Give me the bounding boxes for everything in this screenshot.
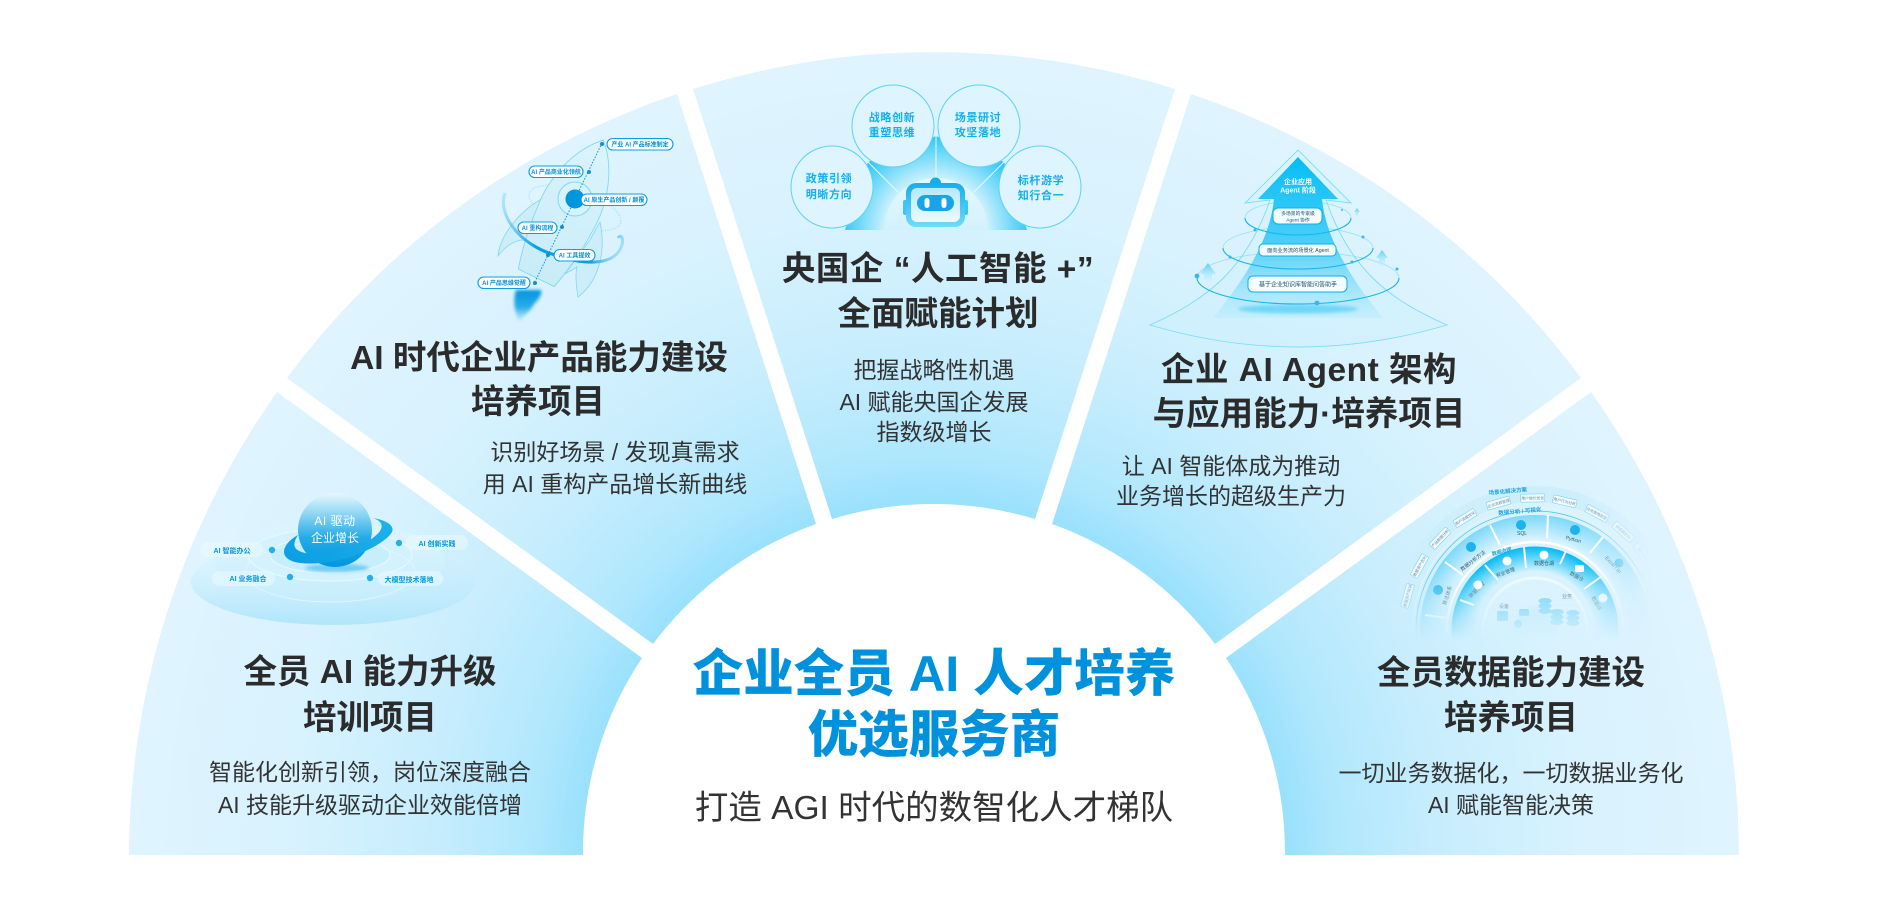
illustration: agent arrow pyramid: 企业应用: [1284, 177, 1312, 186]
illustration: AI planet: 企业增长: [311, 530, 359, 545]
center subtitle: 打造 AGI 时代的数智化人才梯队: [695, 790, 1173, 827]
heading 5: [1377, 655, 1645, 737]
illustration: data rings: 用户行为分析: [1553, 496, 1577, 506]
center title: 企业全员 AI 人才培养: [693, 645, 1175, 702]
sector background 4: [1052, 94, 1581, 644]
illustration: data rings: 产品数据分析: [1430, 528, 1450, 548]
illustration: AI planet: AI 业务融合: [230, 574, 266, 583]
illustration: rocket: AI 产品思维觉醒: [482, 279, 526, 287]
illustration: rocket: AI 工具提效: [559, 252, 590, 260]
heading 4: [1153, 352, 1465, 433]
illustration: data rings: 用户增长优化: [1521, 495, 1544, 501]
illustration: robot with four circles: 重塑思维: [869, 125, 915, 139]
sector background 2: [287, 94, 816, 644]
description 3: [839, 357, 1029, 445]
illustration: robot with four circles: 攻坚落地: [955, 125, 1001, 139]
description 5: [1338, 760, 1684, 818]
heading 2: AI 时代企业产品能力建设: [350, 340, 728, 377]
illustration: data rings: 数据资产培训: [1402, 584, 1413, 607]
illustration: AI planet: 大模型技术落地: [384, 575, 434, 584]
illustration: AI planet: AI 智能办公: [214, 546, 250, 555]
illustration: rocket: AI 重构流程: [522, 224, 553, 232]
illustration: data rings: 安全管理: [1495, 566, 1516, 579]
illustration: AI planet: AI 创新实践: [419, 539, 455, 548]
heading 3: [782, 251, 1094, 333]
heading 1: 全员 AI 能力升级: [243, 654, 497, 691]
heading 2: 培养项目: [471, 384, 605, 421]
heading 5: 培养项目: [1444, 700, 1578, 737]
illustration: agent arrow pyramid: 面向业务流的场景化 Agent: [1267, 246, 1329, 254]
illustration: data rings: 业务: [1562, 593, 1572, 600]
illustration: data rings: 客户分析: [1637, 547, 1650, 562]
illustration: robot with four circles: 场景研讨: [955, 111, 1001, 124]
description 2: [483, 439, 747, 497]
illustration: robot with four circles: 战略创新: [869, 110, 915, 124]
illustration: robot with four circles: 标杆游学: [1018, 173, 1064, 187]
illustration: AI planet: [191, 493, 475, 625]
description 3: AI 赋能央国企发展: [839, 389, 1029, 415]
illustration: AI planet: AI 驱动: [314, 514, 356, 528]
description 3: 把握战略性机遇: [854, 357, 1014, 383]
panel: AI product capability: [287, 94, 816, 644]
illustration: rocket: AI 原生产品创新 / 颠覆: [584, 196, 644, 204]
description 4: [1116, 453, 1346, 509]
description 1: [209, 759, 531, 818]
description 3: 指数级增长: [876, 419, 992, 445]
description 1: 智能化创新引领，岗位深度融合: [209, 759, 531, 785]
panel: full staff AI upgrade: [129, 392, 642, 855]
description 4: 业务增长的超级生产力: [1116, 483, 1346, 509]
description 4: 让 AI 智能体成为推动: [1122, 453, 1340, 479]
illustration: agent arrow pyramid: [1150, 150, 1447, 347]
illustration: data rings: 业务策略制定: [1586, 506, 1608, 521]
illustration: data rings: SQL: [1517, 531, 1527, 537]
illustration: agent arrow pyramid: 基于企业知识库智能问答助手: [1259, 280, 1337, 288]
illustration: rocket: [478, 127, 673, 322]
illustration: robot with four circles: 明晰方向: [806, 187, 852, 201]
description 5: AI 赋能智能决策: [1428, 792, 1594, 818]
illustration: data rings: 供应商优化: [1615, 524, 1632, 540]
illustration: data rings: 数据分析 / 可视化: [1498, 505, 1542, 517]
sector background 3: [693, 52, 1175, 519]
panel: SOE AI plus: [693, 52, 1175, 519]
illustration: data rings: 场景化解决方案: [1488, 485, 1528, 497]
heading 2: [350, 340, 728, 421]
illustration: robot with four circles: 知行合一: [1018, 188, 1064, 202]
heading 3: 全面赋能计划: [838, 296, 1038, 333]
sector background 1: [129, 392, 642, 855]
illustration: data rings: Python: [1565, 535, 1582, 545]
center title: 优选服务商: [808, 706, 1060, 763]
illustration: data rings: 用户流程优化: [1454, 510, 1476, 526]
illustration: data rings: 企业流程管理: [1487, 498, 1510, 509]
illustration: data rings: 数据资产优化: [1412, 555, 1427, 577]
panel: enterprise AI agent: [1052, 94, 1581, 644]
illustration: data rings: 数据湖: [1590, 595, 1603, 612]
illustration: data rings: 数据仓: [1568, 570, 1585, 583]
illustration: agent arrow pyramid: Agent 阶段: [1280, 186, 1316, 194]
sector background 5: [1226, 392, 1739, 855]
description 2: 识别好场景 / 发现真需求: [490, 439, 740, 465]
illustration: agent arrow pyramid: 多场景的专家级: [1281, 210, 1315, 217]
illustration: agent arrow pyramid: Agent 协作: [1286, 216, 1310, 224]
center title: [693, 645, 1175, 763]
description 5: 一切业务数据化，一切数据业务化: [1338, 760, 1684, 786]
illustration: data rings: 算法体系: [1441, 585, 1454, 606]
description 2: 用 AI 重构产品增长新曲线: [483, 471, 747, 497]
illustration: data rings: 数据管理: [1467, 580, 1486, 599]
illustration: data rings: 数据分析方法: [1459, 549, 1487, 573]
illustration: data rings: 数据仓湖: [1534, 560, 1554, 567]
heading 4: 企业 AI Agent 架构: [1161, 352, 1457, 389]
illustration: rocket: AI 产品商业化领航: [531, 168, 581, 176]
illustration: robot with four circles: [791, 85, 1081, 230]
heading 1: [243, 654, 497, 737]
illustration: data rings: 数据治理: [1491, 546, 1512, 558]
description 1: AI 技能升级驱动企业效能倍增: [218, 792, 522, 818]
heading 5: 全员数据能力建设: [1377, 655, 1645, 692]
heading 4: 与应用能力·培养项目: [1153, 396, 1465, 433]
heading 1: 培训项目: [303, 700, 437, 737]
illustration: data rings: Excel / BI: [1603, 555, 1622, 575]
illustration: data rings: [1400, 486, 1646, 637]
illustration: rocket: 产业 AI 产品标准制定: [611, 140, 669, 148]
illustration: robot with four circles: 政策引领: [806, 171, 852, 185]
illustration: data rings: 设备: [1499, 603, 1509, 610]
panel: data capability: [1226, 392, 1739, 855]
heading 3: 央国企 “人工智能 +”: [782, 251, 1094, 288]
